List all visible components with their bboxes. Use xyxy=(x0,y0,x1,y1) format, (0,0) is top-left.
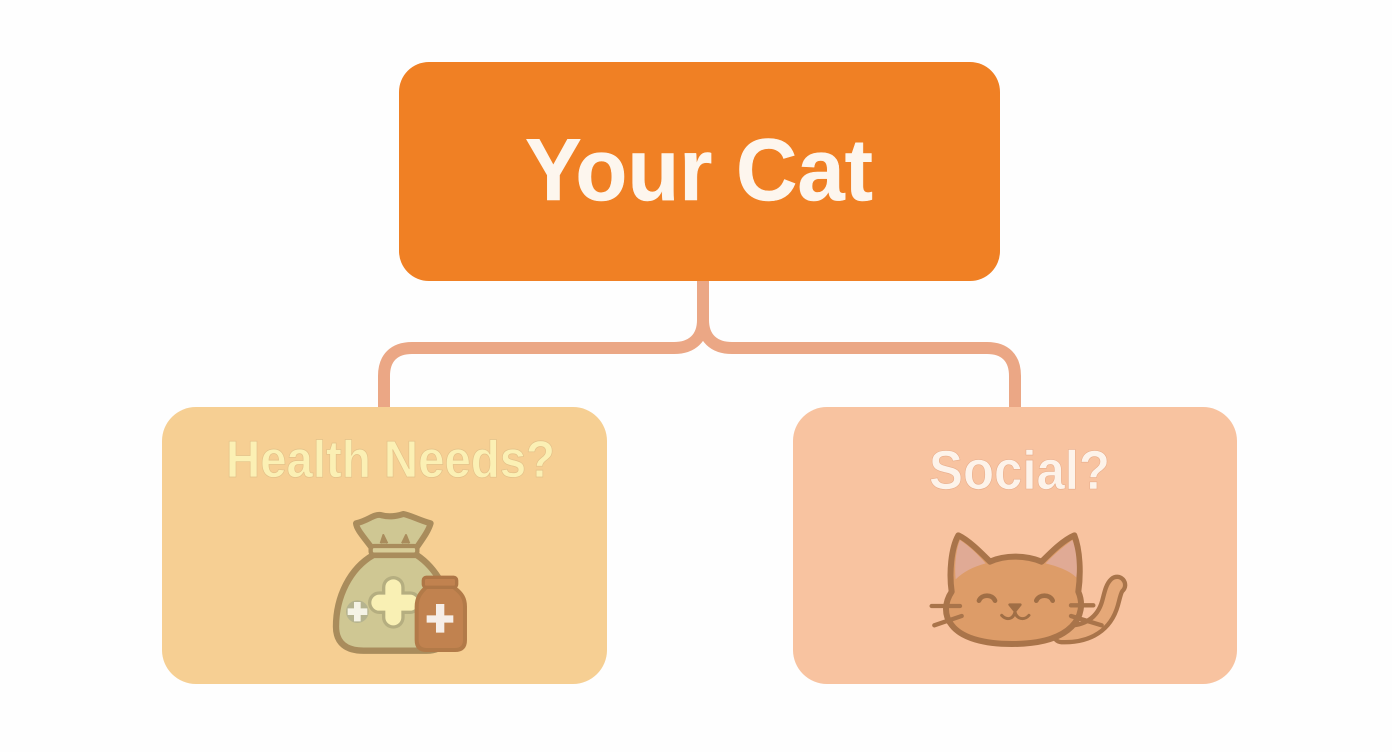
connector: tree lines from root to both branches xyxy=(384,280,1015,410)
icon part: whiskers xyxy=(932,605,1102,625)
icon: smiling cat xyxy=(932,535,1117,644)
icon part: large plus xyxy=(379,587,410,617)
icon part: nose and mouth xyxy=(1010,605,1020,611)
heading: Health Needs?: Health Needs? xyxy=(226,431,555,489)
panel: Social xyxy=(793,407,1237,684)
icon part: eyes xyxy=(979,596,1053,601)
panel: Your Cat root box xyxy=(399,62,1000,281)
icon part: small plus xyxy=(346,600,369,623)
heading: Your Cat: Your Cat xyxy=(525,120,873,219)
icon part: ears xyxy=(955,540,1077,579)
icon: medicine bag and bottle xyxy=(336,514,465,651)
icon part: tail xyxy=(1062,585,1117,634)
heading: Social?: Social? xyxy=(929,439,1110,501)
panel: Health Needs xyxy=(162,407,607,684)
icon part: bottle xyxy=(417,578,465,650)
